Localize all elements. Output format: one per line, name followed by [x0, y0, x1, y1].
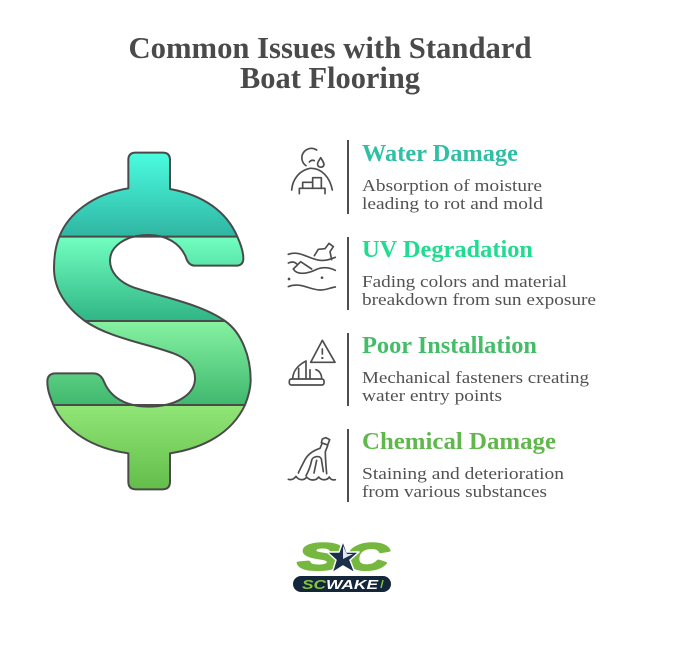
divider bar [347, 140, 349, 214]
icon: boat with warning triangle [289, 340, 335, 385]
panel: uv degradation [288, 237, 596, 310]
title [128, 30, 532, 95]
heading: Water Damage [362, 141, 518, 167]
panel: chemical damage [288, 429, 565, 502]
panel: poor installation [289, 333, 590, 406]
chart: segmented dollar sign [40, 150, 257, 492]
logo letters: C [346, 536, 390, 578]
heading: Chemical Damage [362, 429, 556, 455]
logo accent [381, 580, 383, 588]
logo wordmark: SC WAKE [302, 577, 378, 592]
text block: Mechanical fasteners creating [362, 368, 590, 387]
text block: Absorption of moisture [362, 176, 542, 195]
divider bar [347, 237, 349, 310]
divider bar [347, 333, 349, 406]
icon: person with tear and blocks [292, 148, 332, 194]
text block [362, 368, 590, 405]
text block: from various substances [362, 482, 547, 501]
logo: SC Wake [293, 536, 391, 592]
logo letters [298, 536, 390, 578]
heading: UV Degradation [362, 237, 533, 263]
icon: waves and floating debris [288, 243, 335, 290]
title: Common Issues with Standard [128, 30, 532, 65]
logo pill [293, 576, 391, 592]
title: Boat Flooring [240, 60, 420, 95]
text block: breakdown from sun exposure [362, 290, 596, 309]
text block: Fading colors and material [362, 272, 567, 291]
text block [362, 176, 544, 213]
text block [362, 272, 596, 309]
text block: leading to rot and mold [362, 194, 544, 213]
icon: message in a bottle [288, 438, 335, 480]
divider bar [347, 429, 349, 502]
panel: water damage [292, 140, 544, 214]
text block [362, 464, 565, 501]
heading: Poor Installation [362, 333, 537, 359]
text block: Staining and deterioration [362, 464, 565, 483]
logo star [327, 541, 359, 573]
logo letters: S [298, 536, 343, 578]
text block: water entry points [362, 386, 502, 405]
